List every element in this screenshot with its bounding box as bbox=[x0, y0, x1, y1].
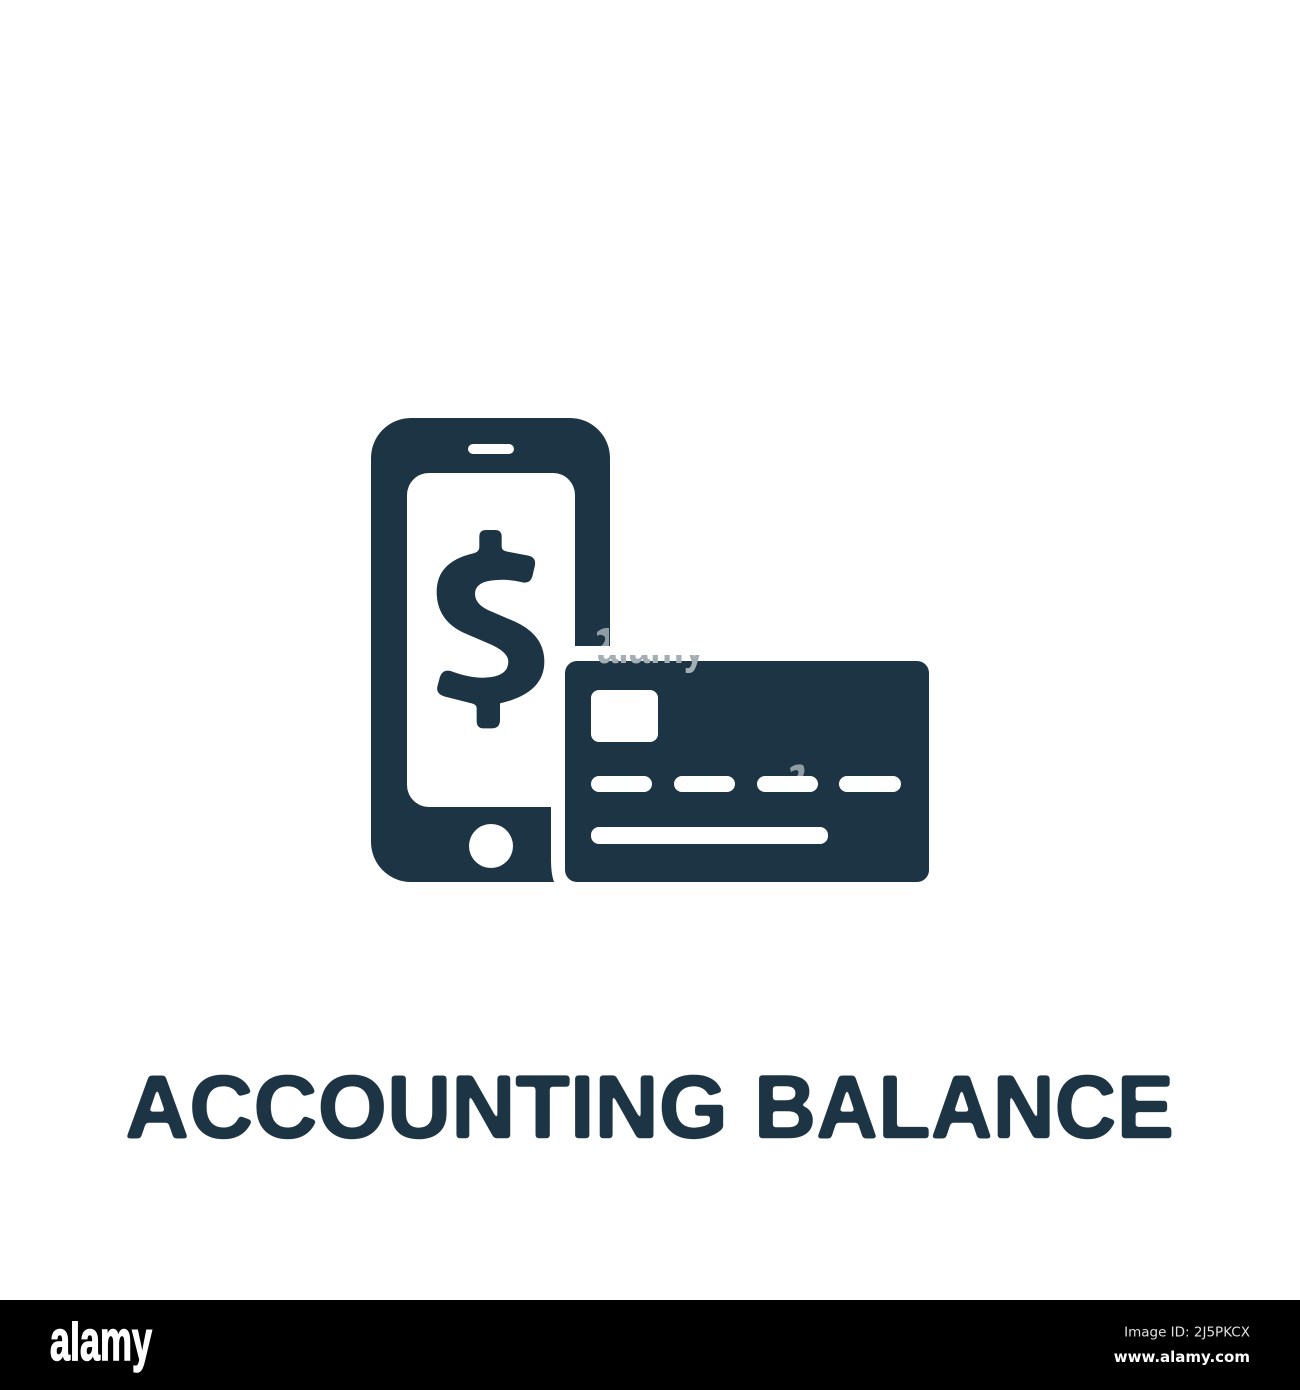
website: www.alamy.com bbox=[1114, 1348, 1250, 1366]
icon: dollar sign bbox=[437, 530, 544, 728]
title bbox=[125, 1056, 1174, 1156]
watermark fragments: alamy bbox=[597, 621, 705, 674]
image id: Image ID: 2J5PKCX bbox=[1124, 1324, 1250, 1340]
icon: smartphone with dollar and credit card bbox=[371, 418, 929, 882]
title: ACCOUNTING bbox=[125, 1056, 728, 1156]
footer bar bbox=[0, 1300, 1300, 1390]
icon: credit card bbox=[565, 661, 929, 882]
title: BALANCE bbox=[754, 1056, 1174, 1156]
watermark fragments bbox=[597, 621, 804, 776]
footer logo: alamy bbox=[50, 1309, 152, 1373]
icon: smartphone body bbox=[371, 418, 610, 882]
